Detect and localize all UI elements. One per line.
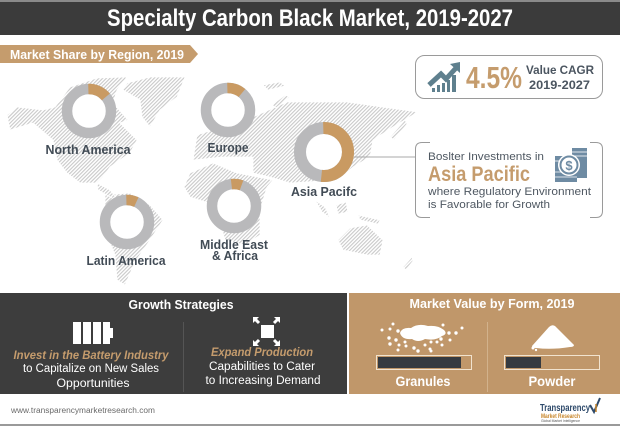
strategy: expand production: to Increasing Demand: [206, 375, 320, 387]
label: Latin America: Latin America: [86, 254, 167, 268]
donut: North America: [46, 89, 132, 157]
icon: rising chart arrow: [429, 62, 460, 92]
icon: expand: [253, 317, 280, 346]
strategy: expand production: [206, 347, 320, 387]
donut: Middle East and Africa: [200, 182, 269, 263]
strategy: expand production: Expand Production: [211, 347, 313, 359]
label: Asia Pacific: Asia Pacifc: [291, 185, 357, 199]
strategy: battery industry: to Capitalize on New Sales: [23, 363, 159, 375]
section ribbon: market share by region: Market Share by Region, 2019: [10, 48, 184, 62]
strategy: battery industry: Opportunities: [56, 378, 130, 390]
label: Middle East and Africa: Middle East: [200, 238, 269, 252]
logo: Transparency Market Research: Transparency: [540, 402, 590, 414]
footer url: www.transparencymarketresearch.com: [10, 406, 155, 415]
callout: Asia Pacific investments: is Favorable for Growth: [428, 199, 550, 211]
label: granules: Granules: [396, 373, 451, 389]
donut: Middle East and Africa: & Africa: [212, 249, 259, 263]
panel: growth strategies: [0, 293, 347, 394]
icon: granules: [380, 322, 464, 353]
connector line: [354, 156, 415, 158]
strategy: expand production: Capabilities to Cater: [209, 361, 315, 373]
label: North America: North America: [46, 143, 132, 157]
panel heading: Market Value by Form, 2019: [410, 297, 575, 311]
title banner: Specialty Carbon Black Market, 2019-2027: [107, 5, 513, 32]
bar: powder: [504, 356, 600, 370]
section ribbon: market share by region: [0, 45, 198, 63]
logo: Transparency Market Research: [540, 398, 600, 423]
strategy: battery industry: [14, 350, 169, 390]
title banner: [0, 0, 620, 35]
callout: value CAGR: 2019-2027: [529, 78, 590, 92]
bar: granules: [376, 356, 472, 370]
label: powder: Powder: [528, 373, 576, 389]
label: Europe: Europe: [208, 141, 249, 155]
logo: Transparency Market Research: Market Research: [541, 414, 580, 420]
CAGR value: 4.5%: [466, 60, 522, 95]
strategy: battery industry: Invest in the Battery Industry: [14, 350, 169, 362]
panel: market value by form: [349, 293, 620, 394]
donut: Latin America: [86, 200, 167, 268]
panel heading: Growth Strategies: [128, 298, 234, 312]
footer line: [0, 424, 620, 426]
callout: value CAGR: [416, 56, 602, 98]
icon: battery: [73, 322, 113, 344]
donut: Europe: [206, 88, 250, 155]
callout text: Boslter Investments in: [428, 151, 544, 163]
callout: Asia Pacific investments: Asia Pacific: [428, 163, 530, 186]
icon: powder: [532, 325, 574, 351]
callout: Asia Pacific investments: [416, 142, 602, 218]
CAGR label: Value CAGR: [526, 63, 594, 77]
logo: Transparency Market Research: Global Market Intelligence: [541, 419, 580, 423]
icon: coins: $: [565, 158, 573, 173]
callout: Asia Pacific investments: where Regulatory Environment: [427, 186, 591, 198]
donut: Asia Pacific: [291, 128, 357, 199]
icon: coins: [555, 148, 587, 182]
world map: [7, 77, 418, 285]
